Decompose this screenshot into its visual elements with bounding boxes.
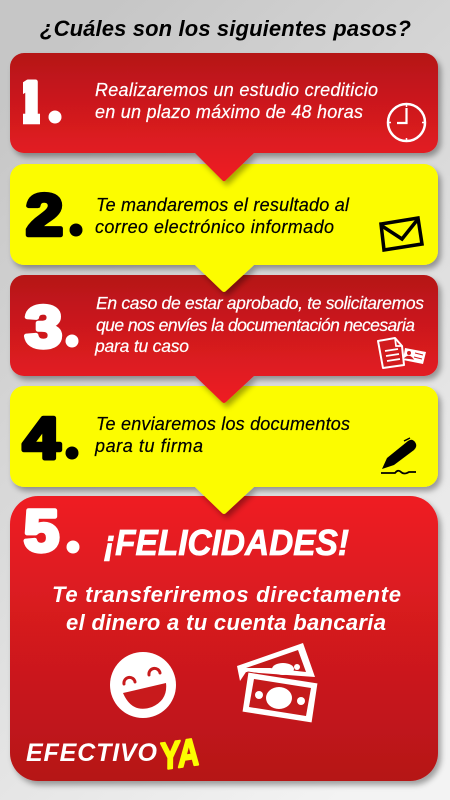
text: step 3: En caso de estar aprobado, te solicitaremos (96, 293, 424, 313)
text: step 1: en un plazo máximo de 48 horas (95, 102, 363, 122)
text: step 3 (94, 293, 424, 356)
text: step 2: Te mandaremos el resultado al (96, 195, 350, 215)
number 3: 3 (25, 295, 62, 360)
number 2: 2 (26, 183, 63, 248)
text: step 2 (95, 195, 350, 237)
text: step 4 (94, 414, 350, 456)
icon: pen (381, 438, 416, 474)
logo: efectivo ya: YA (157, 732, 202, 779)
text: step 4: para tu firma (94, 436, 203, 456)
logo: efectivo ya (26, 732, 202, 779)
panel 1: estudio crediticio (10, 53, 438, 181)
text: step 4: Te enviaremos los documentos (96, 414, 350, 434)
text: step 1 (95, 80, 378, 122)
number 3 (25, 295, 78, 360)
text: step 3: para tu caso (94, 336, 189, 356)
number 4: 4 (23, 406, 60, 471)
text: step 3: que nos envíes la documentación necesaria (96, 315, 415, 335)
panel 5: felicidades (10, 496, 438, 781)
text: step 2: correo electrónico informado (95, 217, 334, 237)
text: transfer: el dinero a tu cuenta bancaria (66, 610, 386, 635)
number 1 (23, 80, 62, 124)
text: step 1: Realizaremos un estudio crediticio (95, 80, 378, 100)
icon: documents (378, 338, 426, 368)
number 5 (24, 499, 80, 564)
panel 2: resultado (10, 164, 438, 292)
logo: efectivo ya: EFECTIVO (26, 739, 158, 767)
number 2 (26, 183, 82, 248)
icon: smiley (110, 652, 176, 718)
icon: money (237, 643, 318, 723)
icon: clock (388, 104, 425, 141)
icon: envelope (381, 218, 422, 250)
panel 3: documentación (10, 275, 438, 403)
number 1: 1 (14, 70, 46, 135)
number 4 (23, 406, 78, 471)
text: transfer: Te transferiremos directamente (52, 582, 401, 607)
text: transfer (52, 582, 401, 635)
number 5: 5 (24, 499, 59, 564)
panel 4: firma (10, 386, 438, 514)
heading: felicidades: ¡FELICIDADES! (104, 522, 349, 563)
title: ¿Cuáles son los siguientes pasos? (40, 16, 411, 41)
